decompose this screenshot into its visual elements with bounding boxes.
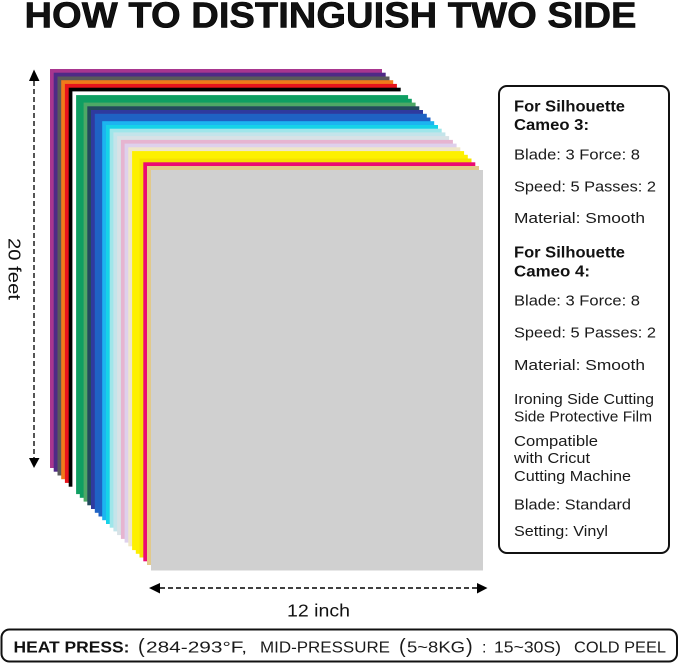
text block: Cricut settings	[514, 496, 631, 540]
callout: heat press instructions: )	[466, 636, 473, 658]
text block: Cameo 3 values: Material: Smooth	[514, 210, 645, 227]
text block: Cricut settings: Setting: Vinyl	[514, 523, 608, 540]
callout: heat press instructions: 15~30S)	[494, 639, 561, 656]
heading: Cameo 4 settings	[514, 244, 625, 280]
text block: Cameo 4 values: Speed: 5 Passes: 2	[514, 324, 656, 342]
label: 12 inch: 12 inch	[287, 600, 350, 620]
text block: compatibility: Cutting Machine	[514, 468, 631, 485]
callout: heat press instructions: HEAT PRESS:	[14, 639, 130, 656]
callout: heat press instructions: COLD PEEL	[574, 639, 666, 656]
text block: sides: Side Protective Film	[514, 408, 652, 426]
text block: compatibility: with Cricut	[513, 450, 591, 467]
text block: compatibility: Compatible	[514, 433, 598, 450]
callout: heat press instructions: :	[482, 639, 486, 656]
heading: Cameo 3 settings: Cameo 3:	[514, 117, 589, 134]
text block: Cameo 3 values: Blade: 3 Force: 8	[514, 146, 640, 164]
arrow: vertical dimension	[29, 70, 40, 468]
text block: Cameo 4 values: Material: Smooth	[514, 357, 645, 374]
label: 20 feet: 20 feet	[4, 238, 24, 300]
text block: Cameo 3 values: Speed: 5 Passes: 2	[514, 178, 656, 196]
text block: compatibility	[513, 433, 631, 485]
heading: Cameo 3 settings: For Silhouette	[514, 98, 625, 116]
text block: sides: Ironing Side Cutting	[514, 391, 654, 408]
callout: heat press instructions: (	[399, 636, 406, 658]
callout: heat press instructions: 284-293°F,	[146, 639, 247, 656]
text block: sides	[514, 391, 654, 426]
arrow: horizontal dimension	[149, 583, 488, 594]
callout: heat press instructions	[2, 630, 677, 662]
callout: heat press instructions: MID-PRESSURE	[260, 639, 390, 656]
heading: Cameo 4 settings: For Silhouette	[514, 244, 625, 262]
illustration: stack of coloured vinyl sheets	[50, 69, 483, 570]
text block: Cameo 4 values	[514, 292, 656, 374]
callout: heat press instructions: 5~8KG	[407, 639, 465, 656]
heading: Cameo 4 settings: Cameo 4:	[514, 264, 590, 280]
callout: heat press instructions: (	[138, 636, 145, 658]
heading: Cameo 3 settings	[514, 98, 625, 134]
text block: Cameo 4 values: Blade: 3 Force: 8	[514, 292, 640, 310]
text block: Cricut settings: Blade: Standard	[514, 496, 631, 514]
text block: Cameo 3 values	[514, 146, 656, 227]
panel: cutting settings	[499, 86, 669, 553]
